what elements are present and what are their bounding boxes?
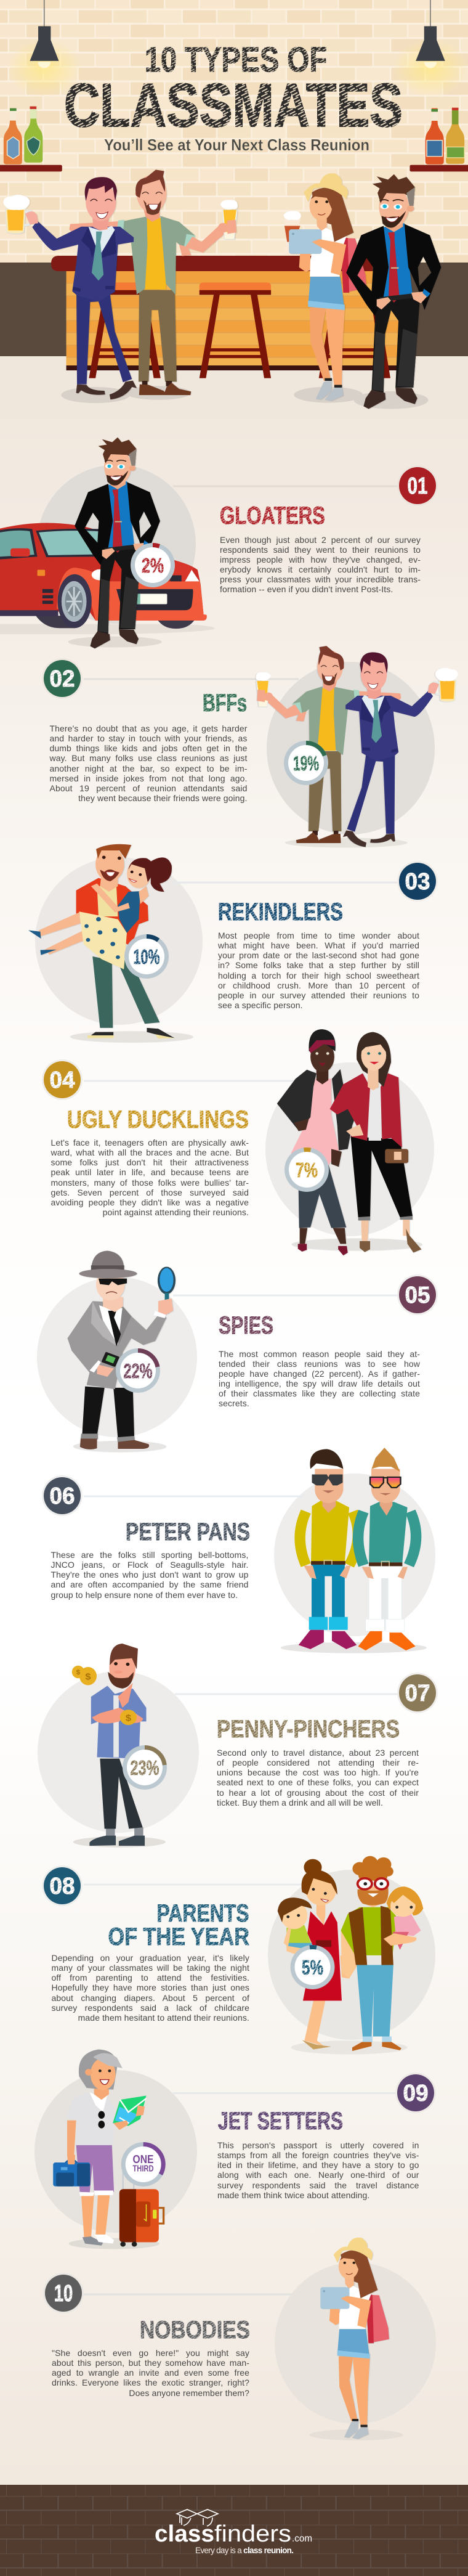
text: parents body: made them hesitant to attend their reunions.: [78, 2013, 249, 2023]
text: spies body: ing intelligence, the spy will draw life details out: [219, 1379, 420, 1388]
heading: [108, 1900, 249, 1950]
backdrop circle: [35, 857, 203, 1025]
connector line: [84, 678, 299, 680]
ring chart: one third: ONE: [133, 2153, 154, 2166]
figure: two friends: [256, 646, 458, 847]
badge 09: 09: [403, 2081, 429, 2106]
text: ugly ducklings body: [50, 1138, 249, 1217]
text: bffs body: they went because their friends were going.: [78, 793, 248, 803]
text: parents body: survey respondents said a lack of childcare: [52, 2003, 249, 2013]
badge 09: [395, 2073, 436, 2113]
backdrop circle: [274, 1473, 435, 1636]
figure: traveller with luggage: [53, 2050, 164, 2249]
connector line: [84, 1883, 302, 1886]
badge 06: 06: [49, 1483, 75, 1509]
badge 02: [42, 658, 83, 699]
hero panel: bar scene: [0, 0, 468, 409]
text: nobodies body: Does anyone remember them?: [129, 2388, 249, 2398]
connector line: [84, 2294, 291, 2295]
title: 10 types of: 10 TYPES OF: [145, 40, 327, 79]
text: jet setters body: made them think twice about attending.: [217, 2190, 369, 2200]
text: bffs body: dumb things like kids and jobs often get in the: [49, 743, 248, 753]
text: peter pans body: JNCO jeans, or Flock of Seagulls-style hair.: [50, 1560, 249, 1570]
text: ugly ducklings body: some folks just don't hit their attractiveness: [50, 1157, 249, 1167]
text: bffs body: another night at the bar, so expect to be im-: [49, 764, 248, 773]
badge 07: 07: [405, 1681, 430, 1706]
connector line: [173, 2092, 397, 2094]
text: jet setters body: survey respondents said the travel distance: [217, 2180, 419, 2190]
text: ugly ducklings body: ward, what with all the braces and the acne. But: [50, 1147, 249, 1157]
text: bffs body: [49, 723, 248, 803]
text: rekindlers body: holding a torch for their high school sweetheart: [218, 971, 419, 980]
text: spies body: secrets.: [219, 1398, 249, 1408]
subtitle: You’ll See at Your Next Class Reunion: [104, 136, 369, 154]
text: spies body: [219, 1348, 420, 1408]
badge 10: 10: [54, 2281, 73, 2307]
badge 03: 03: [405, 869, 430, 895]
text: jet setters body: stamps from all the foreign countries they've vis-: [217, 2150, 419, 2160]
text: penny-pinchers body: of people considered not attending their re-: [217, 1758, 419, 1767]
text: penny-pinchers body: to hear a lot of grousing about the cost of their: [217, 1788, 419, 1798]
text: jet setters body: [217, 2140, 419, 2200]
text: jet setters body: This person's passport is utterly covered in: [217, 2140, 419, 2150]
text: peter pans body: and are often accompanied by the same friend: [50, 1579, 249, 1589]
logo: classfinders.com: [155, 2521, 312, 2547]
icon: graduation caps: [177, 2509, 218, 2526]
text: parents body: many of your classmates will be taking the night: [52, 1963, 249, 1973]
badge 04: [42, 1059, 83, 1100]
text: bffs body: mersed in inside jokes from not that long ago.: [49, 773, 248, 783]
badge 01: 01: [408, 473, 427, 499]
figure: couple: [28, 844, 193, 1042]
logo: classfinders.com: finders: [214, 2521, 291, 2547]
text: gloaters body: [220, 535, 421, 594]
text: parents body: off from parenting to attend the festivities.: [52, 1973, 249, 1983]
text: bffs body: way. But many folks use class reunions as just: [49, 753, 248, 763]
text: ugly ducklings body: avoiding people they didn't like was a negative: [50, 1197, 249, 1207]
ring chart: 10%: [124, 934, 169, 979]
floor shadows: [61, 386, 429, 409]
icon: red sports car: [0, 523, 215, 634]
text: penny-pinchers body: unions because the cost was too high. If you're: [217, 1767, 419, 1777]
text: rekindlers body: in? Some folks take that a step further by still: [218, 960, 419, 970]
ring chart: 23%: [123, 1745, 167, 1790]
panel: 03 rekindlers: [28, 844, 438, 1043]
panel: 05 spies: [37, 1251, 438, 1453]
text: rekindlers body: what might have been. What if you'd married: [218, 940, 419, 950]
panel: 02 bffs: [42, 646, 458, 848]
backdrop circle: [275, 2262, 436, 2424]
heading: SPIES: [219, 1312, 273, 1339]
panel: 06 peter pans: [42, 1448, 435, 1653]
badge 10: [43, 2273, 84, 2313]
ring chart: 5%: 5%: [302, 1956, 323, 1979]
ring chart: 10%: 10%: [133, 945, 160, 968]
connector line: [175, 1694, 397, 1695]
heading: BFFs: [203, 690, 247, 717]
panel: 10 nobodies: [43, 2237, 436, 2440]
text: bffs body: There's no doubt that as you age, it gets harder: [49, 723, 248, 733]
ring chart: one third: THIRD: [133, 2164, 154, 2174]
text: ugly ducklings body: gets. Seven percent of those surveyed said: [50, 1188, 249, 1197]
text: penny-pinchers body: Second only to travel distance, about 23 percent: [217, 1748, 419, 1758]
text: rekindlers body: your prom date or the last-second shot had gone: [218, 950, 419, 960]
heading: GLOATERS: [220, 502, 325, 529]
figure: gloater: [68, 438, 162, 648]
text: jet setters body: along with each one. Nearly one-third of our: [217, 2170, 419, 2180]
text: nobodies body: "She doesn't even go here!" you might say: [52, 2348, 249, 2358]
friends with beers: [4, 169, 238, 399]
text: penny-pinchers body: ticket. Buy them a drink and all will be well.: [217, 1798, 383, 1808]
text: rekindlers body: Most people from time to time wonder about: [218, 931, 419, 940]
text: rekindlers body: people in our survey attended their reunions to: [218, 990, 419, 1000]
text: spies body: people have changed (22 percent). As if gather-: [219, 1369, 420, 1379]
heading: PARENTS: [156, 1900, 249, 1927]
bar counter: [51, 256, 400, 370]
ring chart: 19%: [284, 741, 328, 785]
floor: [0, 356, 468, 419]
brick texture: [0, 2485, 468, 2576]
text: nobodies body: about this person, but they somehow have man-: [52, 2358, 249, 2368]
figure: spy with magnifying glass: [68, 1251, 176, 1452]
text: gloaters body: respondents said they went to their reunions to: [220, 545, 421, 555]
text: nobodies body: aged to wrangle an invite and even some free: [52, 2368, 249, 2378]
backdrop circle: [268, 1870, 435, 2040]
badge 08: 08: [49, 1873, 75, 1899]
text: parents body: Hopefully they have more stories than just ones: [52, 1983, 249, 1992]
text: parents body: about changing diapers. About 5 percent of: [52, 1993, 249, 2003]
connector line: [84, 1080, 299, 1082]
ring chart: 22%: 22%: [123, 1359, 153, 1382]
backdrop circle: [34, 2070, 197, 2233]
panel: 01 gloaters: [0, 438, 436, 648]
ring chart: 23%: 23%: [131, 1756, 159, 1779]
ring chart: 2%: 2%: [142, 554, 164, 577]
ring chart: 2%: [131, 543, 175, 587]
text: penny-pinchers body: seated next to one of these folks, you can expect: [217, 1777, 419, 1787]
figure: bearded man with coins: [72, 1644, 166, 1848]
brick wall: [0, 0, 468, 263]
badge 01: [397, 465, 438, 506]
heading: PENNY-PINCHERS: [217, 1716, 400, 1743]
text: parents body: Depending on your graduation year, it's likely: [52, 1953, 249, 1963]
man in black suit: [346, 174, 441, 409]
ring chart: 7%: 7%: [296, 1159, 318, 1181]
girl with tablet: [289, 173, 366, 401]
figure: bearded man with coins: $: [76, 1669, 81, 1676]
text: ugly ducklings body: monsters, many of those folks were bullies' tar-: [50, 1178, 249, 1188]
shelf and bottles right: [410, 108, 468, 171]
text: gloaters body: impress people with how they've changed, ev-: [220, 555, 421, 565]
text: bffs body: About 19 percent of reunion attendants said: [49, 783, 248, 793]
connector line: [173, 1294, 399, 1297]
text: peter pans body: They're the ones who just don't want to grow up: [50, 1570, 249, 1579]
backdrop circle: [37, 1277, 197, 1437]
text: parents body: [52, 1953, 249, 2023]
text: bffs body: and harder to stay in touch with your friends, as: [49, 733, 248, 743]
heading: PETER PANS: [126, 1518, 250, 1546]
text: nobodies body: [52, 2348, 249, 2398]
text: gloaters body: erybody knows it certainly couldn't hurt to im-: [220, 565, 421, 574]
ring chart: 22%: [116, 1348, 160, 1393]
beer glass on bar: [283, 211, 302, 255]
connector line: [173, 486, 397, 487]
logo: classfinders.com: class: [155, 2521, 214, 2547]
panel: 08 parents of the year: [42, 1856, 435, 2055]
text: spies body: tended their class reunions was to see how: [219, 1359, 420, 1369]
text: gloaters body: press your classmates with your incredible trans-: [220, 574, 421, 584]
badge 02: 02: [49, 666, 75, 692]
badge 03: [397, 861, 438, 902]
tagline: Every day is a class reunion.: [195, 2546, 294, 2555]
text: ugly ducklings body: point against attending their reunions.: [103, 1207, 249, 1217]
bar stools: [89, 282, 390, 378]
backdrop circle: [38, 1671, 199, 1833]
text: gloaters body: Even though just about 2 percent of our survey: [220, 535, 421, 545]
text: jet setters body: ited in their lifetime, and they have a story to go: [217, 2160, 419, 2170]
heading: NOBODIES: [140, 2317, 250, 2344]
footer: brick band with logo: [0, 2485, 468, 2576]
panel: 09 jet setters: [34, 2050, 436, 2249]
text: peter pans body: [50, 1550, 249, 1600]
text: ugly ducklings body: peak until later in life, and because teens are: [50, 1167, 249, 1177]
text: peter pans body: These are the folks still sporting bell-bottoms,: [50, 1550, 249, 1560]
backdrop circle: [267, 662, 435, 834]
panel: 07 penny-pinchers: [38, 1644, 438, 1848]
shelf and bottles left: [0, 107, 62, 171]
figure: family: [278, 1856, 423, 2055]
pendant lamps: [7, 0, 468, 97]
badge 08: [42, 1865, 83, 1906]
heading: REKINDLERS: [218, 899, 343, 926]
text: ugly ducklings body: Let's face it, teenagers often are physically awk-: [50, 1138, 249, 1147]
figure: bearded man with coins: $: [126, 1713, 131, 1723]
backdrop circle: [265, 1062, 434, 1236]
ring chart: 7%: [284, 1147, 329, 1192]
text: rekindlers body: [218, 931, 419, 1010]
heading: JET SETTERS: [218, 2108, 343, 2135]
text: spies body: The most common reason people said they at-: [219, 1348, 420, 1358]
text: rekindlers body: see a specific person.: [218, 1000, 303, 1010]
title: classmates: CLASSMATES: [64, 71, 403, 139]
connector line: [173, 881, 400, 884]
logo: classfinders.com: .com: [292, 2533, 312, 2544]
ring chart: one third: [121, 2142, 166, 2187]
heading: OF THE YEAR: [108, 1923, 249, 1950]
heading: UGLY DUCKLINGS: [67, 1106, 249, 1133]
text: nobodies body: drinks. Everyone likes the exotic stranger, right?: [52, 2378, 249, 2387]
text: spies body: of their classmates like they are collecting state: [219, 1388, 420, 1398]
badge 05: 05: [405, 1282, 430, 1308]
text: penny-pinchers body: [217, 1748, 419, 1808]
badge 06: [42, 1475, 83, 1516]
figure: bearded man with coins: $: [85, 1672, 91, 1682]
connector line: [84, 1495, 303, 1498]
dark wainscot band: [0, 263, 468, 356]
ring chart: 5%: [290, 1944, 335, 1990]
badge 05: [397, 1274, 438, 1315]
figure: girl with tablet: [309, 2238, 403, 2440]
badge 07: [397, 1673, 438, 1713]
figure: two retro men: [281, 1448, 427, 1653]
backdrop circle: [37, 465, 196, 624]
panel: 04 ugly ducklings: [42, 1029, 434, 1256]
text: gloaters body: formation -- even if you didn't invent Post-Its.: [220, 584, 393, 594]
figure: two women: [277, 1029, 422, 1255]
text: rekindlers body: or childhood crush. More than 10 percent of: [218, 980, 419, 990]
badge 04: 04: [49, 1067, 75, 1093]
text: peter pans body: group to help ensure none of them ever have to.: [50, 1590, 238, 1600]
ring chart: 19%: 19%: [293, 752, 319, 775]
